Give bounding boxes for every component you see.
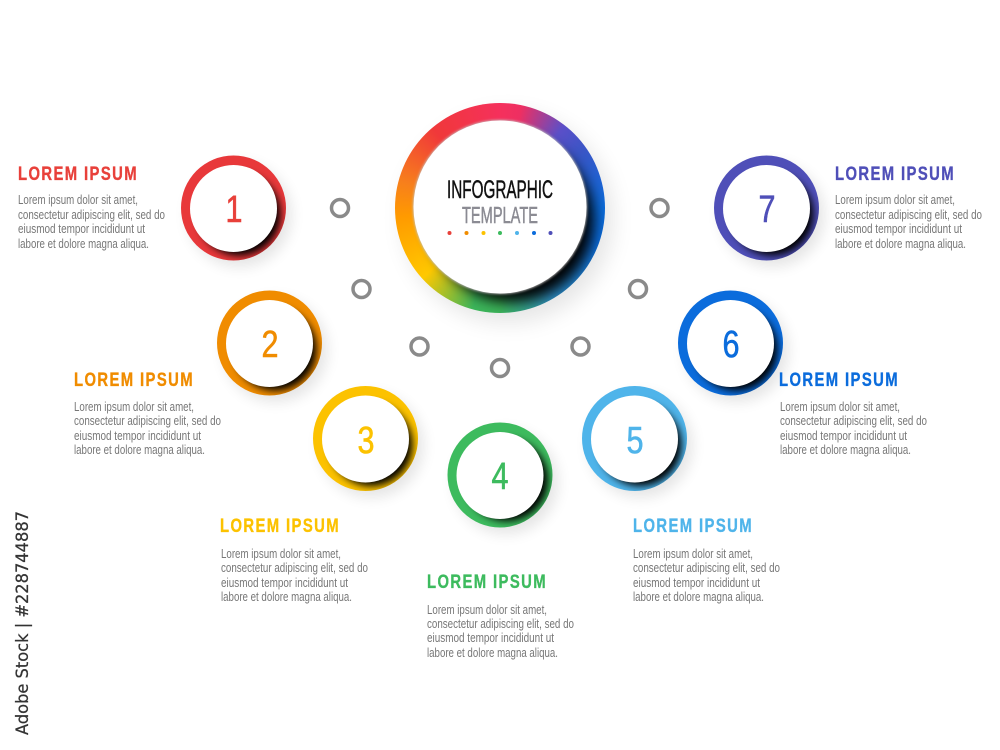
step 4 circle [448, 422, 558, 534]
text block 6: labore et dolore magna aliqua. [780, 443, 911, 457]
text block 5: Lorem ipsum dolor sit amet, [633, 547, 753, 561]
step 6 circle [678, 290, 788, 402]
text block 4: eiusmod tempor incididunt ut [427, 631, 554, 645]
central hub colour ring [395, 103, 605, 313]
text block 5: consectetur adipiscing elit, sed do [633, 561, 780, 575]
text block 3: labore et dolore magna aliqua. [221, 590, 352, 604]
step 1 circle: 1 [226, 189, 242, 231]
text block 3: Lorem ipsum dolor sit amet, [221, 547, 341, 561]
text block 1: labore et dolore magna aliqua. [18, 237, 149, 251]
text block 7: labore et dolore magna aliqua. [835, 237, 966, 251]
text block 3: LOREM IPSUM [220, 515, 339, 536]
text block 7: eiusmod tempor incididunt ut [835, 222, 962, 236]
text block 5 [633, 515, 780, 604]
text block 3: consectetur adipiscing elit, sed do [221, 561, 368, 575]
central hub disc with title [413, 120, 594, 302]
text block 6: LOREM IPSUM [779, 369, 898, 390]
vertical stock credit: Adobe Stock | #228744887 [13, 511, 33, 735]
step 3 circle: 3 [358, 420, 374, 462]
text block 4 [427, 571, 574, 660]
text block 5: LOREM IPSUM [633, 515, 752, 536]
text block 5: eiusmod tempor incididunt ut [633, 576, 760, 590]
text block 2: consectetur adipiscing elit, sed do [74, 414, 221, 428]
text block 4: consectetur adipiscing elit, sed do [427, 617, 574, 631]
text block 3: eiusmod tempor incididunt ut [221, 576, 348, 590]
text block 2: LOREM IPSUM [74, 369, 193, 390]
step 5 circle: 5 [626, 420, 644, 462]
step 2 circle: 2 [262, 324, 278, 366]
text block 1 [18, 163, 165, 251]
text block 2 [74, 369, 221, 457]
text block 6: Lorem ipsum dolor sit amet, [780, 400, 900, 414]
text block 1: LOREM IPSUM [18, 163, 137, 184]
text block 7: Lorem ipsum dolor sit amet, [835, 193, 955, 207]
step 7 circle: 7 [758, 189, 776, 231]
step 6 circle: 6 [722, 324, 740, 366]
hub title: INFOGRAPHIC [447, 176, 553, 204]
text block 4: Lorem ipsum dolor sit amet, [427, 603, 547, 617]
text block 3 [220, 515, 368, 604]
text block 6: consectetur adipiscing elit, sed do [780, 414, 927, 428]
step 7 circle [714, 156, 824, 267]
text block 4: LOREM IPSUM [427, 571, 546, 592]
text block 2: eiusmod tempor incididunt ut [74, 429, 201, 443]
connector dots [332, 200, 668, 376]
text block 1: eiusmod tempor incididunt ut [18, 222, 145, 236]
hub subtitle: TEMPLATE [462, 202, 538, 228]
text block 1: Lorem ipsum dolor sit amet, [18, 193, 138, 207]
step 1 circle [181, 156, 292, 267]
step 4 circle: 4 [492, 456, 508, 498]
text block 5: labore et dolore magna aliqua. [633, 590, 764, 604]
step 5 circle [582, 386, 692, 498]
hub colour dots [448, 231, 552, 235]
text block 2: Lorem ipsum dolor sit amet, [74, 400, 194, 414]
text block 1: consectetur adipiscing elit, sed do [18, 208, 165, 222]
text block 6 [779, 369, 927, 457]
text block 7: LOREM IPSUM [835, 163, 954, 184]
text block 6: eiusmod tempor incididunt ut [780, 429, 907, 443]
text block 4: labore et dolore magna aliqua. [427, 646, 558, 660]
step 2 circle [217, 290, 328, 402]
text block 2: labore et dolore magna aliqua. [74, 443, 205, 457]
step 3 circle [313, 386, 424, 498]
text block 7 [835, 163, 982, 251]
